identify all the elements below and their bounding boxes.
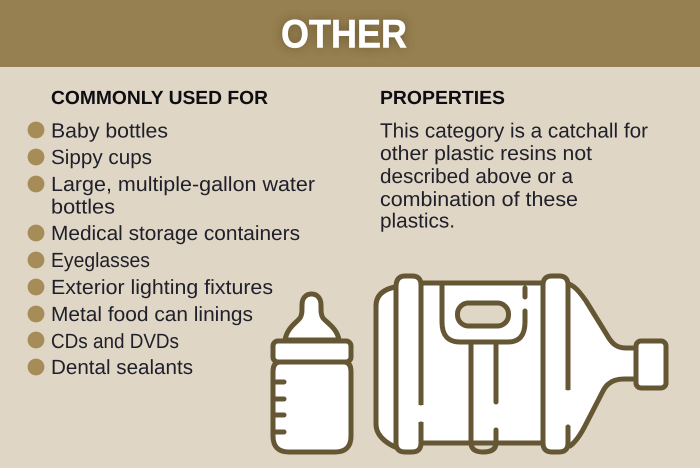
bullet list: Baby bottles (51, 120, 168, 142)
properties description: plastics. (380, 210, 455, 232)
jug lower stems (471, 342, 496, 452)
bullet list: bottles (51, 196, 115, 218)
properties description (380, 120, 648, 232)
jug handle (442, 284, 525, 342)
jug right strap (543, 276, 568, 452)
bullet list: Dental sealants (51, 356, 193, 379)
heading: commonly used for: COMMONLY USED FOR (51, 88, 268, 109)
panel: commonly used for (28, 88, 315, 379)
jug left strap (396, 276, 421, 452)
bullet list: Sippy cups (51, 146, 152, 169)
icon: baby bottle (273, 294, 351, 452)
heading: properties: PROPERTIES (380, 88, 505, 109)
bullet list (28, 120, 315, 379)
jug cap (636, 341, 666, 388)
jug body (376, 283, 640, 447)
title: OTHER (281, 12, 407, 56)
bullet list: Metal food can linings (51, 303, 253, 326)
properties description: This category is a catchall for (380, 120, 648, 142)
jug handle hole (458, 303, 508, 326)
bullet list: Medical storage containers (51, 222, 300, 245)
icon: water jug (376, 276, 666, 452)
bullet list: Eyeglasses (51, 249, 150, 272)
properties description: other plastic resins not (380, 142, 592, 165)
bullet list: Large, multiple-gallon water (51, 173, 315, 196)
properties description: combination of these (380, 188, 578, 211)
bullet list: Exterior lighting fixtures (51, 276, 273, 299)
header banner: OTHER (281, 12, 407, 56)
properties description: described above or a (380, 165, 574, 188)
bullet list: CDs and DVDs (51, 330, 179, 353)
strap cut-outs (417, 405, 425, 422)
header banner (0, 0, 700, 67)
panel: properties (380, 88, 648, 232)
